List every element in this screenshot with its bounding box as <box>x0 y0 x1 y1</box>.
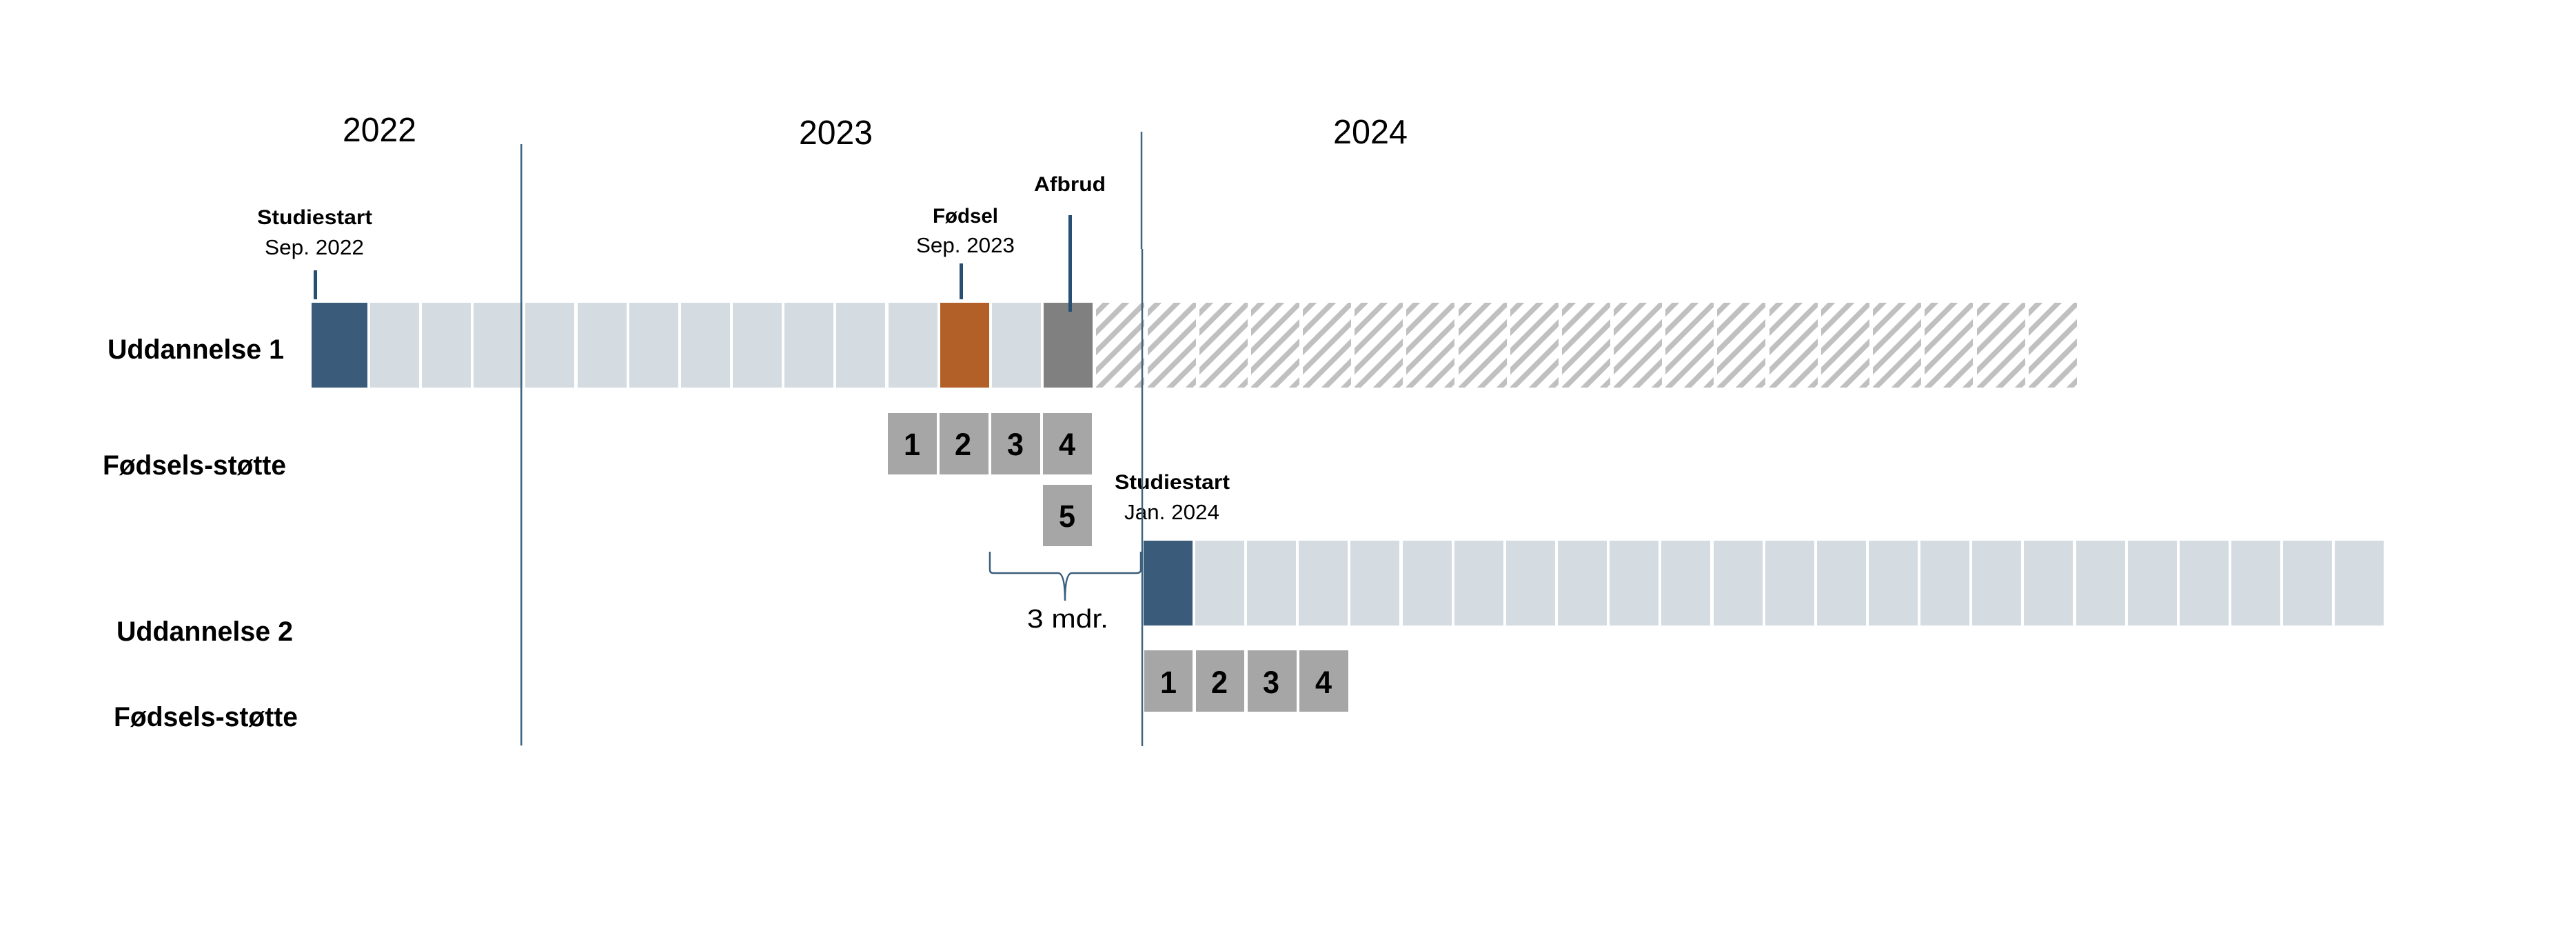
box 3 <box>991 413 1040 474</box>
marker: Studiestart Jan. 2024: Studiestart <box>1115 471 1230 494</box>
marker: Fødsel Sep. 2023 <box>916 205 1015 299</box>
birth support boxes for education 2 <box>1144 650 1348 712</box>
box 4 <box>1299 650 1348 712</box>
birth support boxes for education 1 <box>888 413 1092 546</box>
year headings <box>343 112 1408 152</box>
box 5 <box>1043 485 1092 546</box>
marker: Studiestart Sep. 2022: Studiestart <box>257 206 372 229</box>
hatched remaining months <box>1096 303 2077 388</box>
box 5: 5 <box>1059 499 1075 534</box>
box 2: 2 <box>1211 665 1228 700</box>
marker: Afbrud: Afbrud <box>1034 173 1106 196</box>
divider line between 2022 and 2023 <box>520 144 523 745</box>
box 3: 3 <box>1263 665 1279 700</box>
box 4: 4 <box>1059 427 1075 462</box>
study start month <box>1144 541 1193 625</box>
marker: Studiestart Sep. 2022: Sep. 2022 <box>265 235 364 259</box>
study start month <box>312 303 367 388</box>
box 4: 4 <box>1315 665 1332 700</box>
marker: Studiestart Sep. 2022 <box>257 206 372 299</box>
remaining months <box>1195 541 2384 625</box>
box 1: 1 <box>1160 665 1177 700</box>
marker: Fødsel Sep. 2023: Fødsel <box>933 205 998 228</box>
completed months before birth <box>370 303 937 388</box>
box 2: 2 <box>955 427 971 462</box>
year 2022: 2022 <box>343 112 416 149</box>
box 2 <box>1196 650 1244 712</box>
box 1 <box>1144 650 1193 712</box>
birth month <box>940 303 989 388</box>
month after birth <box>992 303 1041 388</box>
dropout month <box>1044 303 1093 388</box>
marker: Afbrud <box>1034 173 1106 312</box>
marker: Studiestart Jan. 2024: Jan. 2024 <box>1124 500 1219 524</box>
marker: Fødsel Sep. 2023: Sep. 2023 <box>916 233 1015 257</box>
box 3: 3 <box>1007 427 1024 462</box>
row label: Uddannelse 1: Uddannelse 1 <box>108 334 284 365</box>
row label: Fødsels-støtte 2: Fødsels-støtte <box>114 702 298 732</box>
brace: 3 month gap: 3 mdr. <box>1027 605 1108 634</box>
box 2 <box>940 413 988 474</box>
education 2 timeline bar <box>1144 541 2384 625</box>
education 1 timeline bar <box>312 303 2077 388</box>
marker: Studiestart Jan. 2024 <box>1115 471 1230 524</box>
box 3 <box>1248 650 1297 712</box>
box 1: 1 <box>904 427 920 462</box>
box 1 <box>888 413 937 474</box>
year 2023: 2023 <box>799 114 873 152</box>
year 2024: 2024 <box>1333 114 1408 151</box>
box 4 <box>1043 413 1092 474</box>
row label: Fødsels-støtte 1: Fødsels-støtte <box>103 450 286 481</box>
row label: Uddannelse 2: Uddannelse 2 <box>116 617 293 647</box>
brace: 3 month gap <box>990 552 1141 634</box>
